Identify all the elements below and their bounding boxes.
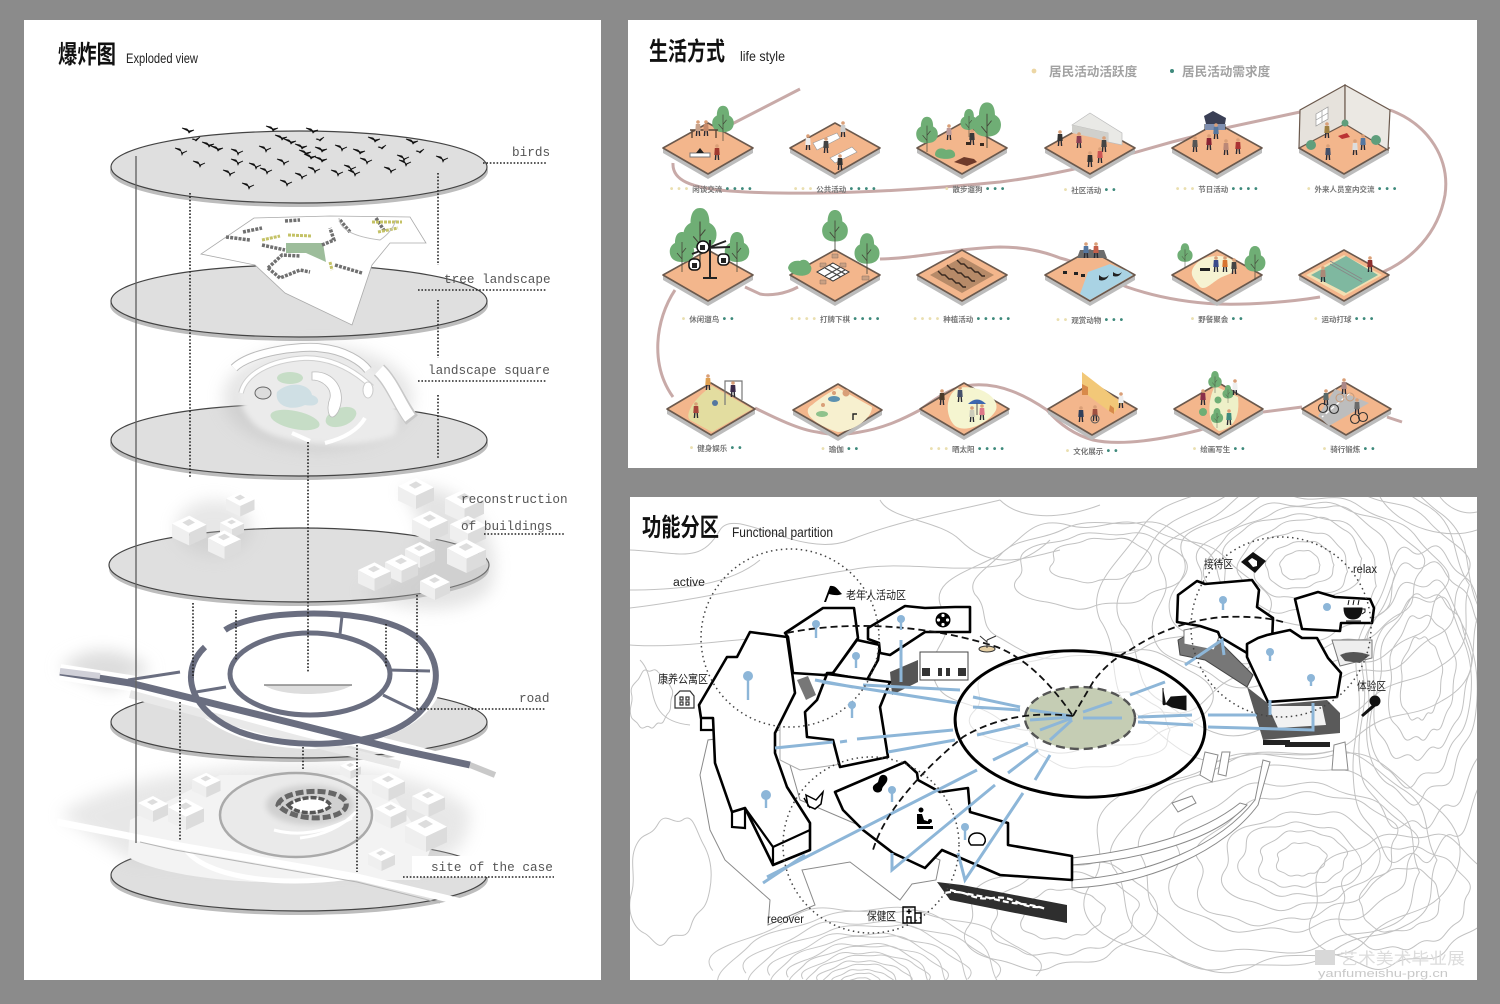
tile: 打牌下棋 xyxy=(788,210,880,325)
layer disc: tree landscape xyxy=(110,216,488,341)
caption: • 瑜伽 • • xyxy=(821,444,859,455)
title: functional partition: 功能分区 xyxy=(642,514,719,542)
road network xyxy=(60,609,495,775)
tile: 晒太阳 xyxy=(920,383,1009,455)
icon: peanut shapes xyxy=(873,775,887,793)
tile: 社区活动 xyxy=(1045,113,1135,196)
caption: • • • • 打牌下棋 • • • • xyxy=(790,314,880,325)
blue connection lines xyxy=(763,640,1313,883)
title: exploded view xyxy=(58,41,199,69)
tile: 种植活动 xyxy=(913,250,1011,325)
caption: • • • 节日活动 • • • • xyxy=(1176,184,1258,195)
caption: • • • 晒太阳 • • • • xyxy=(930,444,1004,455)
labels: exploded layers: tree landscape xyxy=(444,272,551,287)
location pins xyxy=(743,596,1331,840)
tile: 散步遛狗 xyxy=(916,102,1007,195)
caption: • • 观赏动物 • • • xyxy=(1056,315,1124,326)
legend xyxy=(1032,64,1271,79)
tree landscape map xyxy=(201,216,426,325)
tile: 外来人员室内交流 xyxy=(1299,85,1397,195)
layer disc: site of the case xyxy=(57,761,488,915)
tile: 绘画写生 xyxy=(1174,371,1263,455)
icon: microphone xyxy=(1361,696,1380,717)
caption: • 外来人员室内交流 • • • xyxy=(1307,184,1397,195)
caption: • • • 公共活动 • • • • xyxy=(794,184,876,195)
zone labels: 保健区 xyxy=(867,909,896,923)
labels: exploded layers xyxy=(403,145,568,877)
dark building details xyxy=(797,625,1372,923)
layer disc: road xyxy=(60,609,495,775)
panel: functional partition xyxy=(630,497,1477,980)
tile: 瑜伽 xyxy=(793,384,882,455)
title: life style: life style xyxy=(740,48,785,64)
legend: 居民活动需求度 xyxy=(1182,64,1271,79)
panel: life style xyxy=(628,20,1477,468)
labels: exploded layers: reconstruction xyxy=(461,492,568,507)
watermark: 艺术美术毕业展 xyxy=(1340,950,1465,968)
icon: sprout xyxy=(979,636,996,652)
title: life style: 生活方式 xyxy=(649,37,725,66)
title: functional partition xyxy=(642,514,833,542)
icon: bubble xyxy=(969,833,985,845)
caption: • 散步遛狗 • • • xyxy=(945,184,1005,195)
buildings left cluster xyxy=(172,492,254,559)
caption: • 运动打球 • • • xyxy=(1314,314,1374,325)
tile: 休闲遛鸟 xyxy=(663,208,753,325)
title: exploded view: 爆炸图 xyxy=(58,41,116,69)
tile: 观赏动物 xyxy=(1045,242,1135,326)
zone labels: recover xyxy=(767,914,804,926)
icon: coffee cup xyxy=(1344,600,1365,621)
tile: 节日活动 xyxy=(1172,111,1262,195)
icon: apartment house xyxy=(675,691,694,708)
caption: • 健身娱乐 • • xyxy=(690,443,742,454)
legend: 居民活动活跃度 xyxy=(1049,64,1138,79)
caption: • 社区活动 • • xyxy=(1064,185,1116,196)
zone labels xyxy=(658,557,1386,926)
tile: 公共活动 xyxy=(790,121,880,195)
icon: reception sign xyxy=(1241,552,1266,573)
title: exploded view: Exploded view xyxy=(126,50,199,66)
caption: • 骑行锻炼 • • xyxy=(1323,444,1375,455)
icon: flag xyxy=(824,586,842,602)
caption: • 休闲遛鸟 • • xyxy=(682,314,734,325)
caption: • • • 闲谈交流 • • • • xyxy=(670,184,752,195)
icon: film reel xyxy=(936,612,950,628)
zone labels: 体验区 xyxy=(1357,679,1386,693)
central green xyxy=(1025,687,1135,749)
layer disc: landscape square xyxy=(110,346,488,480)
dotted zone circles xyxy=(701,537,1371,933)
panel: exploded view xyxy=(24,20,601,980)
labels: exploded layers: landscape square xyxy=(428,363,550,378)
tile: 野餐聚会 xyxy=(1172,243,1265,325)
icon: hospital xyxy=(903,907,921,923)
labels: exploded layers: of buildings xyxy=(461,519,552,534)
caption: • • • • 种植活动 • • • • • xyxy=(913,314,1011,325)
caption: • 绘画写生 • • xyxy=(1193,444,1245,455)
vertical connector lines xyxy=(136,156,438,872)
site model xyxy=(57,761,474,905)
zone labels: active xyxy=(673,577,705,589)
building blocks xyxy=(699,580,1374,880)
zone labels: 老年人活动区 xyxy=(846,588,906,602)
title: functional partition: Functional partition xyxy=(732,524,833,540)
contour lines xyxy=(630,497,1477,980)
zone labels: 接待区 xyxy=(1204,557,1233,571)
icon: dog xyxy=(804,792,823,809)
tile: 健身娱乐 xyxy=(667,374,755,454)
layer disc: birds xyxy=(110,126,488,207)
secondary site outlines xyxy=(700,670,1348,925)
icon: hairdryer xyxy=(1163,688,1186,710)
watermark: yanfumeishu-prg.cn xyxy=(1318,968,1448,980)
icon: massage xyxy=(917,808,933,829)
buildings right cluster xyxy=(358,478,494,609)
dashed zone arcs xyxy=(787,617,1283,850)
caption: • 野餐聚会 • • xyxy=(1191,314,1243,325)
tile: 运动打球 xyxy=(1299,250,1389,325)
big plaza ellipse xyxy=(951,645,1209,803)
labels: exploded layers: birds xyxy=(512,145,550,160)
tile: 闲谈交流 xyxy=(663,106,753,195)
caption: • 文化展示 • • xyxy=(1066,446,1118,457)
zone labels: 康养公寓区 xyxy=(658,672,708,686)
site label backing xyxy=(412,856,555,877)
birds flock xyxy=(175,126,448,189)
tile: 文化展示 xyxy=(1048,372,1137,457)
layer disc: reconstruction of buildings xyxy=(109,478,494,609)
labels: exploded layers: site of the case xyxy=(431,860,553,875)
route line xyxy=(658,89,1446,442)
watermark xyxy=(1315,950,1465,980)
labels: exploded layers: road xyxy=(519,691,549,706)
zone labels: relax xyxy=(1353,564,1377,576)
tile: 骑行锻炼 xyxy=(1302,378,1391,455)
landscape square model xyxy=(223,346,413,450)
